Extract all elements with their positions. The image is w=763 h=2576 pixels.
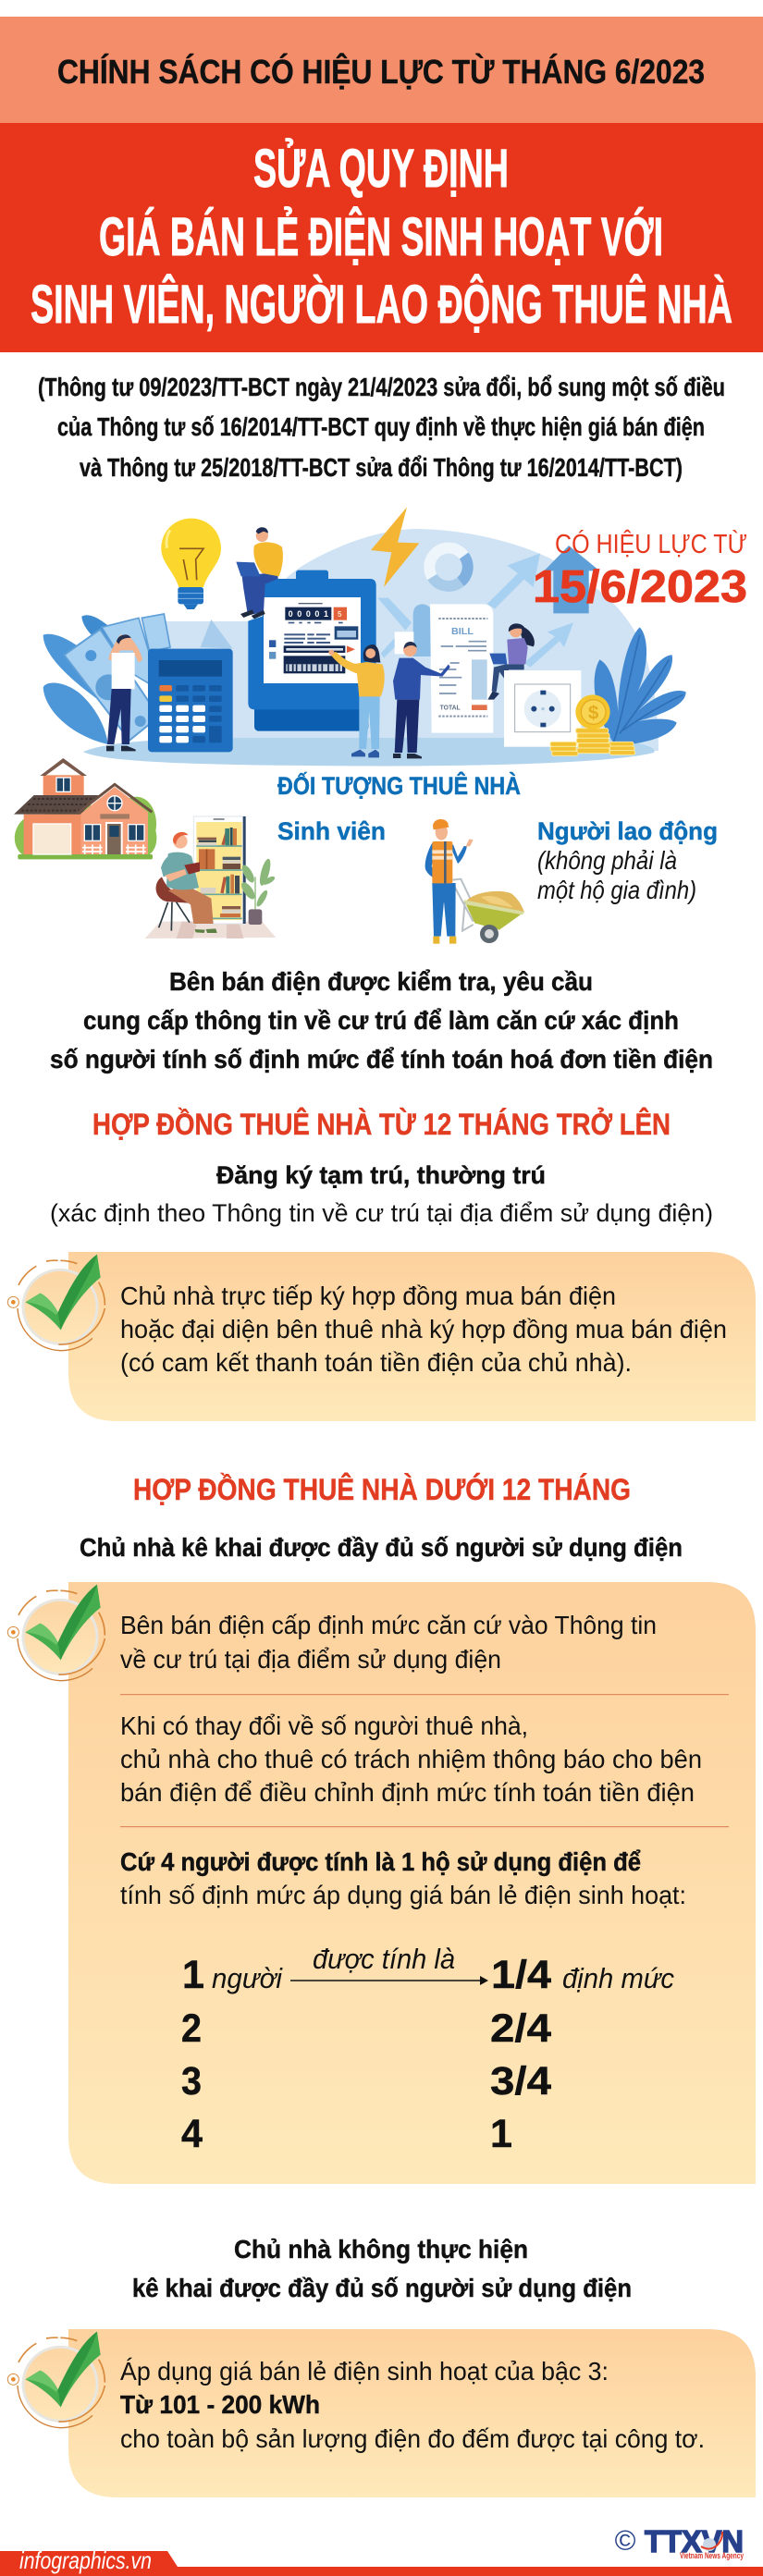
left scene: 5 [338,610,342,619]
yellow sweater woman arm [330,652,379,696]
icon: check mark [7,1255,105,1351]
chair [156,877,188,903]
person [168,885,214,924]
lightning [371,507,419,587]
light bulb [161,519,221,587]
conversion table: 1 [182,1953,204,1997]
panel: landlord signs [68,1252,756,1421]
conversion table: người [212,1962,283,1994]
legal reference text [38,373,725,482]
icon: check mark [7,2332,105,2428]
heading: contract from 12 months: HỢP ĐỒNG THUÊ NHÀ TỪ 12 THÁNG TRỞ LÊN [92,1108,671,1141]
panel: quota rules: Khi có thay đổi về số người thuê nhà, [120,1711,528,1740]
man with laptop [242,571,278,615]
label: worker: một hộ gia đình) [537,876,696,904]
subheading: registration [50,1161,713,1227]
house arrow [544,546,599,613]
effective date [533,529,747,612]
right scene: TOTAL [440,705,461,712]
intro text block: số người tính số định mức để tính toán hoá đơn tiền điện [50,1045,713,1073]
top band: policy label [0,17,763,123]
label: student: Sinh viên [277,817,386,845]
subheading: landlord declares: Chủ nhà kê khai được đầy đủ số người sử dụng điện [80,1533,683,1562]
panel: landlord signs: hoặc đại diện bên thuê nhà ký hợp đồng mua bán điện [120,1315,727,1343]
subheading: landlord does not declare: kê khai được đầy đủ số người sử dụng điện [132,2274,632,2302]
conversion table: được tính là [313,1943,455,1975]
panel: tier 3 price [68,2329,756,2497]
growth arrows [487,553,540,608]
intro text block [50,967,713,1073]
conversion table: 2/4 [490,2006,551,2051]
panel: tier 3 price: Áp dụng giá bán lẻ điện sinh hoạt của bậc 3: [120,2357,609,2386]
subheading: registration: (xác định theo Thông tin về cư trú tại địa điểm sử dụng điện) [50,1199,713,1227]
stressed man [108,635,142,663]
label: worker: Người lao động [537,817,718,845]
footer band with site name: infographics.vn [19,2546,152,2574]
calculator [148,649,233,752]
yellow sweater woman [351,662,385,696]
conversion table: 1 [490,2112,512,2156]
heading: contract under 12 months: HỢP ĐỒNG THUÊ NHÀ DƯỚI 12 THÁNG [133,1473,631,1506]
conversion table: định mức [562,1962,674,1994]
panel: landlord signs: Chủ nhà trực tiếp ký hợp đồng mua bán điện [120,1282,616,1310]
woman with laptop [520,627,535,646]
panel: tier 3 price: Từ 101 - 200 kWh [120,2390,320,2419]
panel: landlord signs: (có cam kết thanh toán tiền điện của chủ nhà). [120,1348,632,1377]
donut chart [429,548,468,586]
right plant [595,627,686,746]
conversion table: 2 [181,2006,202,2051]
label: worker: (không phải là [537,846,677,875]
effective date: 15/6/2023 [533,562,747,612]
intro text block: cung cấp thông tin về cư trú để làm căn cứ xác định [83,1006,679,1035]
footer band with site name [0,2546,763,2576]
panel: quota rules: Bên bán điện cấp định mức căn cứ vào Thông tin [120,1611,657,1639]
intro text block: Bên bán điện được kiểm tra, yêu cầu [169,967,593,996]
gold coins [550,729,635,755]
subheading: registration: Đăng ký tạm trú, thường trú [216,1161,546,1189]
heading: rental subjects: ĐỐI TƯỢNG THUÊ NHÀ [277,770,521,800]
right scene: BILL [451,627,474,637]
subheading: landlord does not declare [132,2235,632,2302]
bill [413,604,432,656]
meter [254,703,368,731]
conversion table: 4 [181,2112,203,2156]
panel: quota rules: tính số định mức áp dụng giá bán lẻ điện sinh hoạt: [120,1881,686,1909]
plant [239,858,277,908]
conversion table: 1/4 [491,1953,551,1997]
panel: quota rules: bán điện để điều chỉnh định mức tính toán tiền điện [120,1778,695,1807]
icon: worker with wheelbarrow [425,819,524,944]
right scene: $ [588,702,599,723]
conversion table: 3 [181,2059,202,2104]
logo: TTXVN: © [615,2524,636,2557]
icon: check mark [7,1585,105,1681]
right scene [351,507,686,758]
conversion table [181,1943,674,2156]
label: worker [537,817,718,904]
background blob [162,529,658,751]
logo: TTXVN: TTXVN [645,2524,744,2558]
icon: house [14,758,156,859]
left scene: 00001 [289,609,328,619]
left scene [43,519,379,752]
panel: quota rules [68,1582,756,2184]
panel: quota rules: chủ nhà cho thuê có trách nhiệm thông báo cho bên [120,1745,702,1773]
ground [83,738,655,766]
illustration: electricity meter scene [43,507,686,766]
title banner [0,123,763,352]
icon: student reading [145,816,277,938]
title banner: SỬA QUY ĐỊNH [253,139,509,199]
wall socket [504,670,581,747]
panel: tier 3 price: cho toàn bộ sản lượng điện đo đếm được tại công tơ. [120,2424,705,2453]
blue sweater man [393,658,450,700]
panel: quota rules: Cứ 4 người được tính là 1 hộ sử dụng điện để [120,1847,641,1876]
subheading: landlord does not declare: Chủ nhà không thực hiện [234,2235,528,2263]
conversion table: 3/4 [490,2059,551,2104]
panel: quota rules: về cư trú tại địa điểm sử dụng điện [120,1645,501,1674]
